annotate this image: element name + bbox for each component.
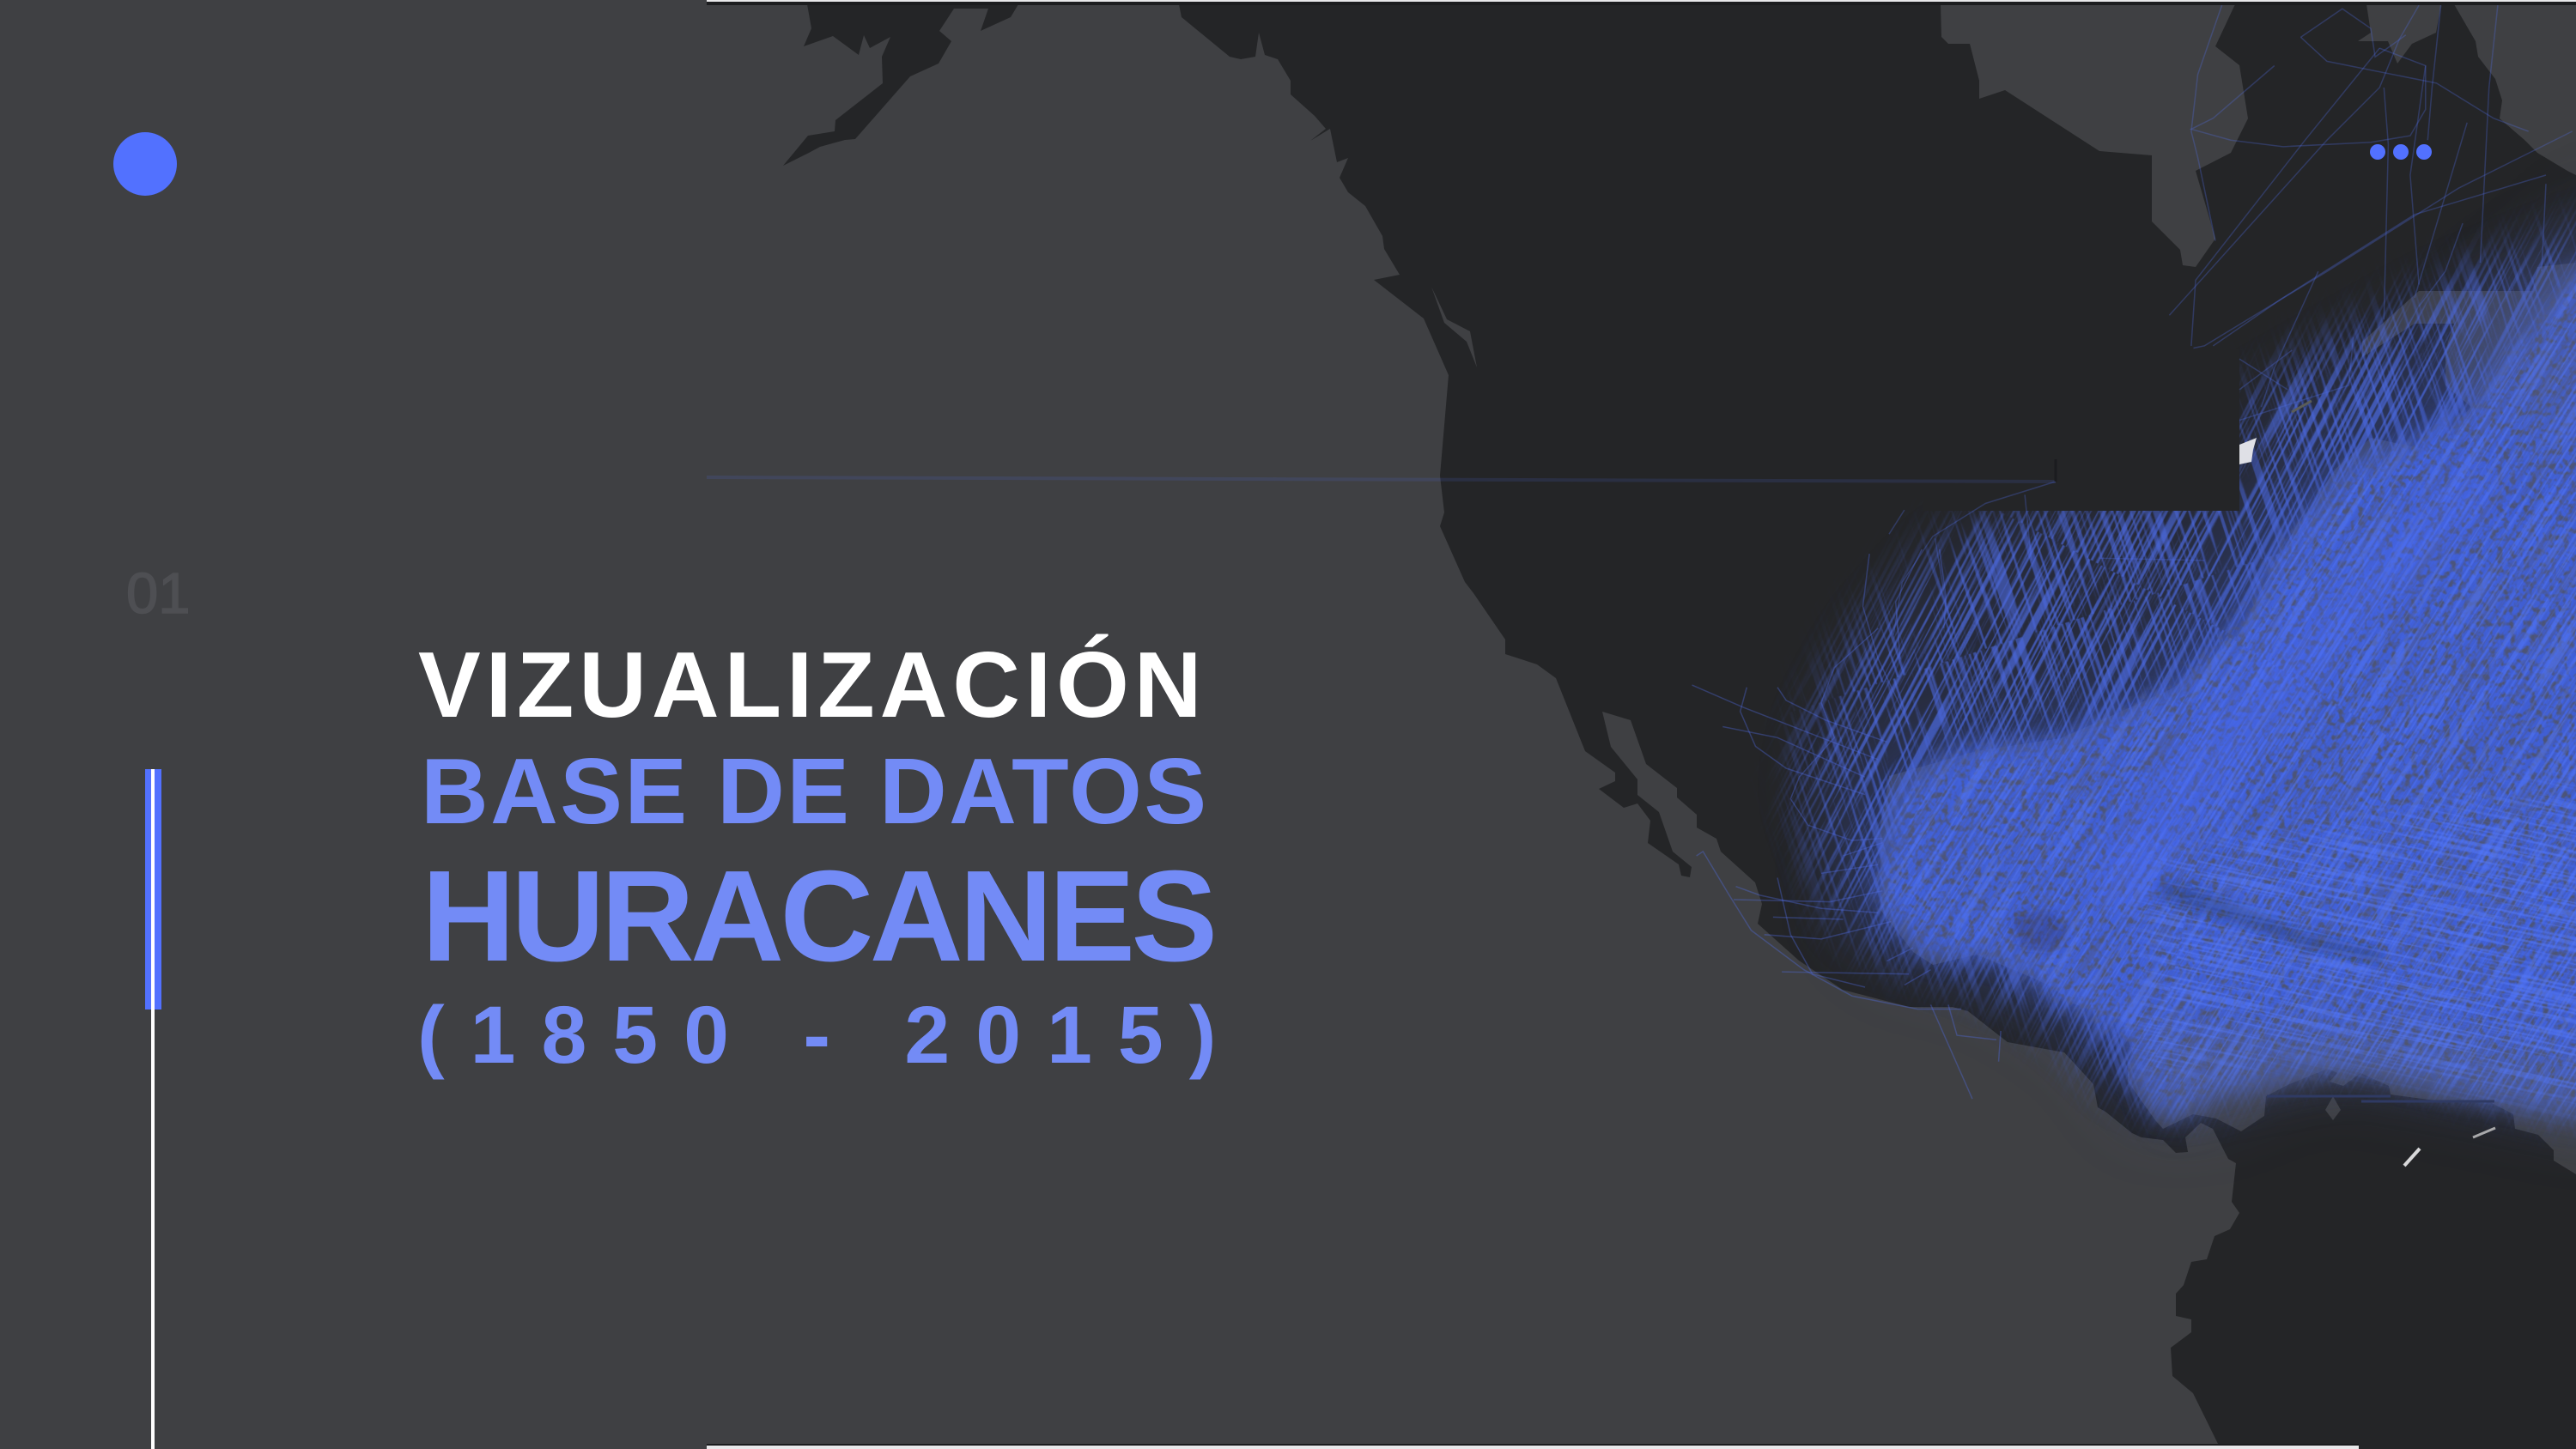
tracks: horizontal streaks lower right xyxy=(2128,766,2576,1119)
tracks: grey pores in dense mass xyxy=(1872,276,2576,1114)
tracks: bright diagonal band xyxy=(1631,86,2576,1288)
speck: small grey mark xyxy=(2292,401,2312,412)
tracks: bright streaks in dense mass xyxy=(1870,268,2576,1125)
land: Newfoundland fragment xyxy=(2546,324,2576,359)
title line 1: VIZUALIZACIÓN xyxy=(418,633,1206,737)
map of North and Central America xyxy=(783,4,2576,1449)
speck: white mark near coast xyxy=(2239,438,2257,464)
tracks: grey wash north-east xyxy=(2475,258,2576,452)
icon: blue dot xyxy=(113,132,177,196)
water: Lake Maracaibo xyxy=(2325,1096,2341,1120)
track: long horizontal line xyxy=(707,477,2056,482)
title line 4: years: (1850 - 2015) xyxy=(417,990,1242,1081)
water: northern strait xyxy=(2358,4,2441,64)
progress bar line xyxy=(151,769,155,1449)
water: Hudson Bay xyxy=(1941,4,2248,267)
tracks: transition glow xyxy=(1827,220,2576,1138)
land: Alaska peninsula xyxy=(783,4,1018,166)
tracks: dense mass xyxy=(1863,256,2576,1129)
tracks: fringe strands crossing xyxy=(1778,209,2576,1129)
tracks: fringe strands north-east xyxy=(1772,203,2576,1133)
speck: grey mark South America xyxy=(2473,1128,2495,1137)
progress bar xyxy=(145,769,161,1449)
tracks: haze over fringe xyxy=(1803,242,2576,1076)
map specks xyxy=(2239,401,2495,1166)
land: North, Central and South America xyxy=(1179,4,2576,1449)
bottom frame line xyxy=(707,1444,2359,1449)
speck: white mark South America xyxy=(2404,1149,2420,1166)
top frame line xyxy=(707,0,2576,5)
water: northwest inlet xyxy=(1431,287,1477,367)
track: bottom line across South America xyxy=(2267,1096,2494,1101)
progress bar fill xyxy=(145,769,161,1009)
tracks: sparse western lines xyxy=(1692,549,2001,1099)
tracks: dark streaks in dense mass xyxy=(1877,275,2576,1103)
icon: three dots menu xyxy=(2370,144,2432,160)
tracks: sparse north-east lines xyxy=(1889,5,2573,635)
title line 3: HURACANES xyxy=(422,843,1213,988)
land: Yucatan xyxy=(2012,908,2069,951)
land: Caribbean islands showing through xyxy=(2160,881,2384,963)
track: short vertical tail xyxy=(2054,459,2057,482)
land cover block xyxy=(1923,349,2239,511)
land: Yucatan showing through xyxy=(2012,908,2069,951)
tracks: grey wash south xyxy=(2133,1009,2576,1116)
hurricane tracks xyxy=(707,5,2576,1145)
title line 2: BASE DE DATOS xyxy=(421,739,1208,844)
section number: 01 xyxy=(126,561,191,626)
title xyxy=(417,633,1242,1081)
